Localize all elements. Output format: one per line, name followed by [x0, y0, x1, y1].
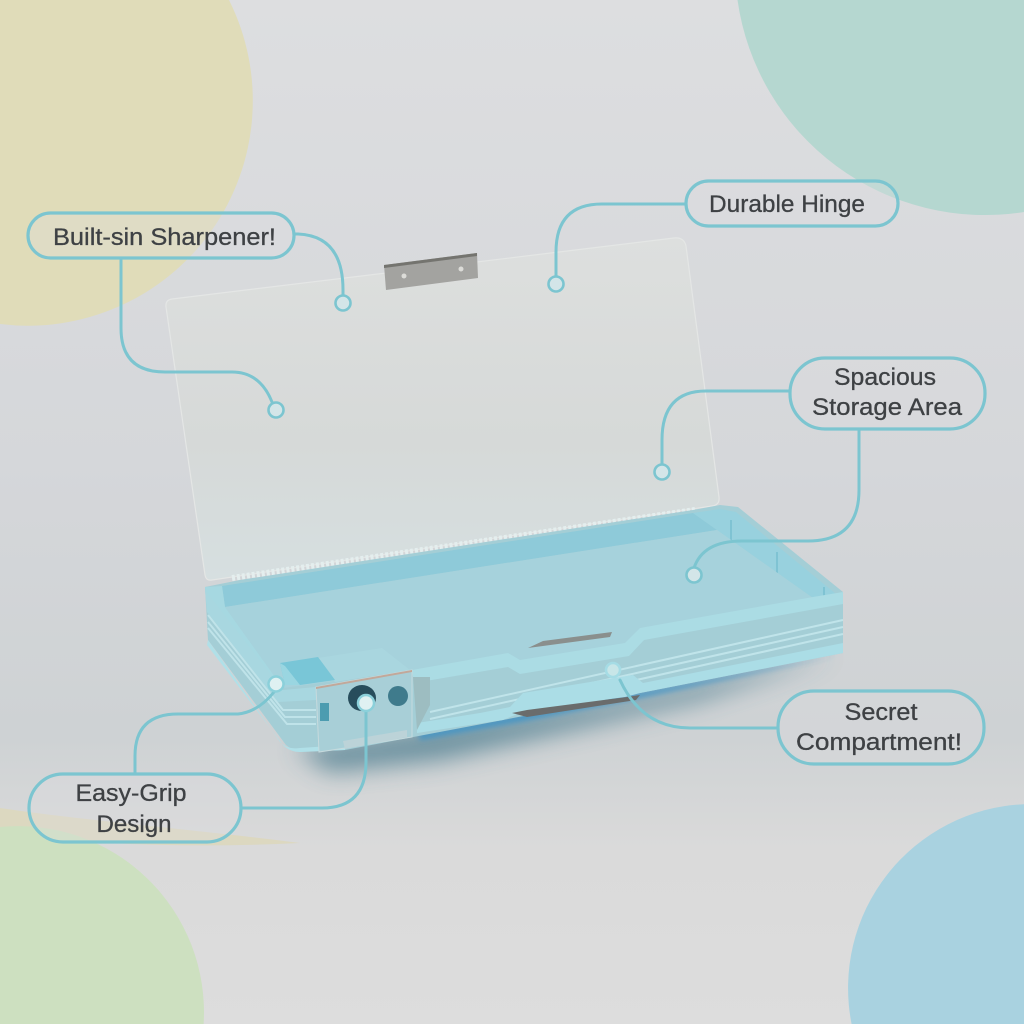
label: grip: Easy-Grip — [76, 780, 186, 807]
lid hinge teeth — [232, 510, 695, 578]
label: storage: Spacious — [834, 364, 936, 391]
marker: grip button — [358, 695, 374, 711]
circle: green bottom-left — [0, 826, 204, 1024]
callout: easy-grip design — [29, 676, 374, 842]
floor — [225, 530, 813, 688]
secret drawer metal — [512, 695, 640, 717]
marker: hinge — [548, 276, 564, 292]
metal latch top — [528, 632, 612, 648]
pill: grip — [29, 774, 241, 842]
pill: storage — [790, 358, 985, 429]
front lower rim — [417, 643, 843, 733]
label: hinge: Durable Hinge — [709, 191, 865, 218]
left face rim and ribs — [205, 590, 345, 752]
connector: sharpener to lid — [121, 258, 272, 402]
label: secret: Secret — [844, 699, 918, 726]
connector: secret — [620, 680, 778, 728]
connector: sharpener to hinge — [294, 234, 343, 296]
connector: storage to floor — [694, 429, 859, 568]
marker: storage lid — [654, 464, 670, 480]
marker: sharpener hinge — [336, 296, 350, 310]
label: secret — [796, 699, 962, 756]
right wall ribs — [731, 520, 824, 597]
label: storage — [812, 364, 963, 421]
connector: grip to button — [241, 710, 366, 808]
shadow under case — [295, 655, 835, 772]
right wall — [693, 509, 836, 598]
sharpener housing — [316, 670, 430, 752]
label: grip — [76, 780, 186, 838]
pencil pocket — [280, 648, 410, 685]
connector: grip to corner — [135, 692, 274, 774]
circle: yellow top-left — [0, 0, 253, 326]
front upper rim — [412, 592, 843, 683]
callout: durable hinge — [548, 181, 898, 292]
callout: spacious storage area — [654, 358, 985, 582]
surface band: pale tan streak — [0, 808, 300, 845]
marker: sharpener lid — [268, 402, 284, 418]
marker: storage floor — [686, 568, 702, 582]
circle: teal top-right — [738, 0, 1024, 215]
label: storage: Storage Area — [812, 394, 963, 421]
pill: hinge — [686, 181, 898, 226]
back wall — [222, 513, 717, 607]
metal hinge — [384, 253, 478, 290]
label: grip: Design — [96, 811, 172, 838]
marker: secret — [606, 663, 620, 677]
case body outer — [205, 505, 843, 752]
connector: storage to lid — [662, 391, 790, 465]
front ridges — [430, 620, 843, 726]
left wall — [205, 586, 283, 690]
callout: built-in sharpener — [28, 213, 350, 418]
marker: grip corner — [268, 676, 284, 692]
label: secret: Compartment! — [796, 729, 962, 756]
pill: secret — [778, 691, 984, 764]
pill: sharpener — [28, 213, 294, 258]
label: sharpener: Built-sin Sharpener! — [53, 224, 276, 251]
connector: hinge — [556, 204, 686, 276]
circle: blue bottom-right — [848, 804, 1024, 1024]
callout: secret compartment — [606, 663, 984, 764]
shadow accent blue — [418, 655, 838, 740]
product: pencil case — [166, 238, 843, 772]
open lid — [166, 238, 719, 580]
